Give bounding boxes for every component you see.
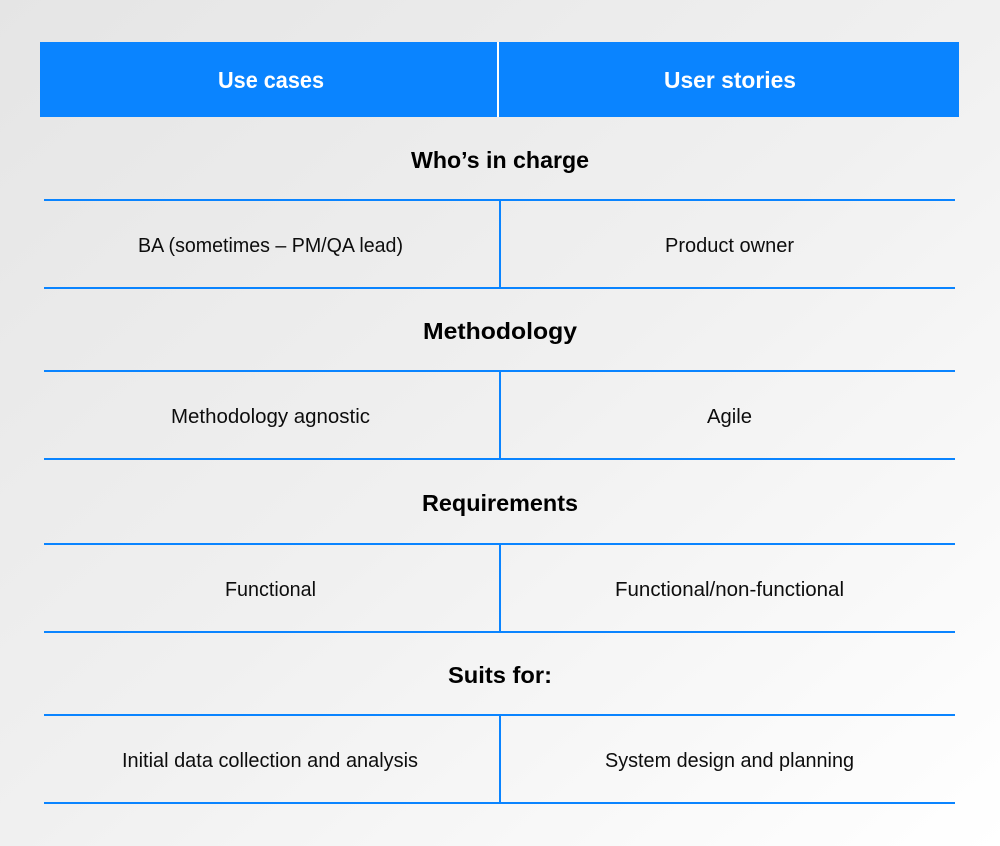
row: suits for (44, 714, 955, 804)
column title: user stories: User stories (664, 67, 796, 93)
row: who's in charge: Product owner (665, 235, 794, 257)
header bar (40, 42, 959, 117)
row: suits for: Initial data collection and analysis (122, 750, 418, 772)
row: requirements: Functional (225, 579, 316, 601)
section heading: suits for: Suits for: (448, 662, 552, 688)
section heading: requirements: Requirements (422, 490, 578, 516)
section heading: methodology: Methodology (423, 318, 577, 344)
row: methodology (44, 370, 955, 460)
row: who's in charge (44, 199, 955, 289)
row: suits for: System design and planning (605, 750, 854, 772)
row: who's in charge: BA (sometimes – PM/QA lead) (138, 235, 403, 257)
row: requirements: Functional/non-functional (615, 579, 844, 601)
column title: use cases: Use cases (218, 67, 324, 93)
section heading: who's in charge: Who’s in charge (411, 147, 589, 173)
row: methodology: Agile (707, 406, 752, 428)
row: methodology: Methodology agnostic (171, 406, 370, 428)
row: requirements (44, 543, 955, 633)
